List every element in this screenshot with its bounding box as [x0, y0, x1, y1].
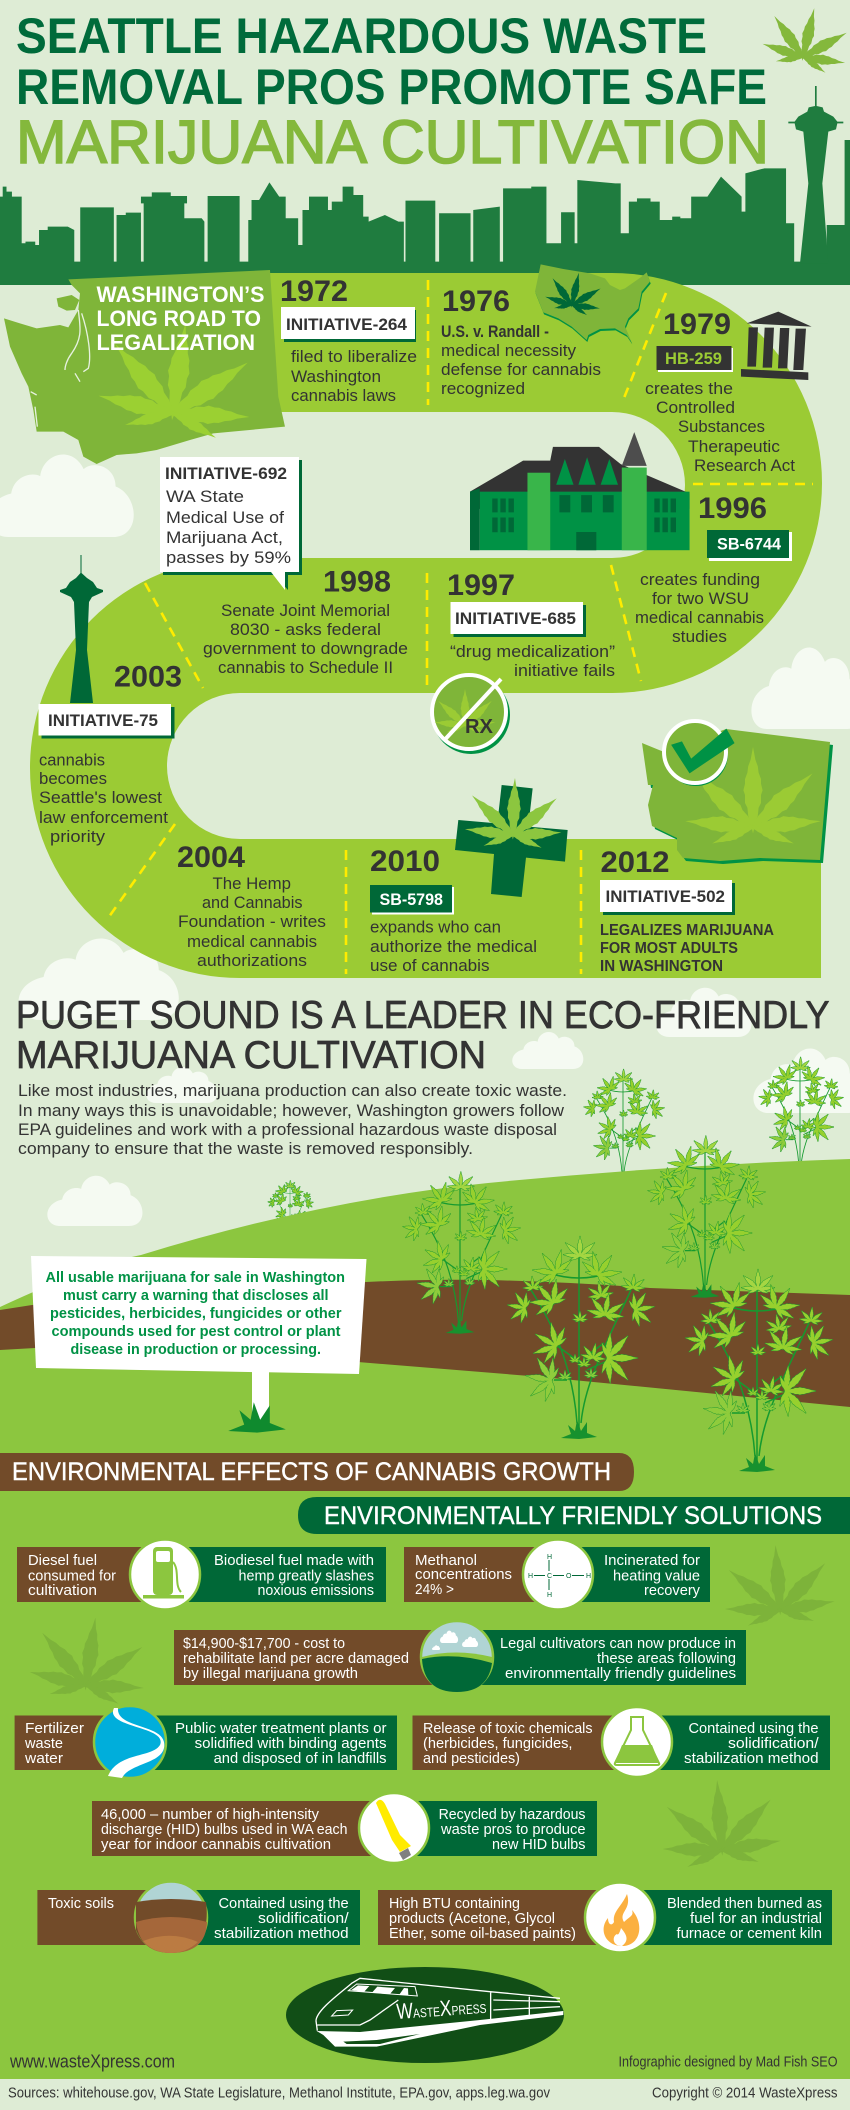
milestone 2004: Foundation - writes	[178, 912, 326, 931]
milestone 2012	[600, 846, 774, 975]
milestone 2010: SB-5798	[380, 891, 443, 909]
item: toxic soils: Toxic soils	[48, 1895, 114, 1912]
item: toxic chemicals: and pesticides)	[423, 1750, 520, 1767]
milestone 2003: becomes	[39, 769, 107, 788]
item: methanol: recovery	[644, 1582, 700, 1599]
milestone 2003: 2003	[114, 660, 182, 694]
milestone 1997: “drug medicalization”	[450, 642, 615, 661]
item: HID bulbs	[92, 1793, 597, 1863]
milestone 2012: LEGALIZES MARIJUANA	[600, 922, 774, 939]
milestone 1976: defense for cannabis	[441, 360, 601, 379]
milestone 1976: U.S. v. Randall -	[441, 322, 549, 341]
icon: methanol molecule: C	[547, 1573, 552, 1580]
item: toxic soils	[37, 1882, 360, 1954]
item: methanol: Incinerated for	[604, 1552, 700, 1569]
title: MARIJUANA CULTIVATION	[16, 108, 769, 176]
hill	[0, 1159, 850, 2079]
icon: RX no-entry	[432, 675, 510, 754]
milestone 1996: creates funding	[640, 570, 760, 589]
item: high BTU products: Blended then burned as	[667, 1895, 822, 1912]
item: fertilizer waste water: water	[24, 1750, 63, 1767]
icon: soil layers	[135, 1882, 207, 1954]
website: www.wasteXpress.com	[9, 2052, 175, 2072]
callout: Initiative-692: Medical Use of	[166, 508, 284, 527]
item: toxic chemicals: solidification/	[728, 1735, 819, 1752]
sign: warning notice: must carry a warning that discloses all	[63, 1287, 328, 1304]
item: toxic chemicals: (herbicides, fungicides,	[423, 1735, 572, 1752]
item: HID bulbs: new HID bulbs	[492, 1836, 586, 1853]
milestone 1979: Controlled	[656, 398, 735, 417]
item: diesel fuel: hemp greatly slashes	[238, 1568, 374, 1584]
item: high BTU products: Ether, some oil-based paints)	[389, 1925, 576, 1942]
item: methanol: concentrations	[415, 1566, 512, 1583]
item: high BTU products: furnace or cement kiln	[676, 1925, 822, 1942]
item: rehabilitation cost: $14,900-$17,700 - cost to	[183, 1635, 345, 1652]
item: diesel fuel: noxious emissions	[258, 1582, 374, 1599]
icon: fuel pump	[143, 1547, 184, 1598]
map: Washington state with heading: LEGALIZATION	[96, 330, 255, 355]
item: toxic chemicals: Release of toxic chemicals	[423, 1720, 592, 1737]
item: diesel fuel: cultivation	[28, 1582, 97, 1599]
item: methanol: 24% >	[415, 1581, 454, 1598]
icon: methanol molecule: O	[566, 1573, 572, 1580]
item: toxic soils: Contained using the	[218, 1895, 349, 1912]
milestone 2003: priority	[50, 827, 106, 846]
icon: HID bulb	[376, 1800, 411, 1860]
milestone 2004: The Hemp	[212, 874, 291, 893]
milestone 1979: Substances	[678, 417, 765, 436]
milestone 1979: Therapeutic	[688, 437, 781, 456]
plants in field	[400, 1135, 836, 1472]
callout: Initiative-692: Marijuana Act,	[166, 528, 283, 547]
sign: warning notice	[31, 1256, 366, 1433]
intro paragraph: EPA guidelines and work with a professional hazardous waste disposal	[18, 1120, 557, 1139]
item: methanol: heating value	[613, 1568, 700, 1584]
icon: space needle	[60, 555, 103, 703]
milestone 1996: 1996	[698, 492, 767, 525]
callout: Initiative-692: passes by 59%	[166, 548, 291, 567]
milestone 1976: 1976	[442, 285, 510, 318]
milestone 1976: medical necessity	[441, 341, 576, 360]
milestone 2004: medical cannabis	[187, 932, 317, 951]
milestone 2003: Seattle's lowest	[39, 788, 162, 807]
milestone 1998: 8030 - asks federal	[230, 620, 381, 639]
milestone 2004	[177, 841, 326, 970]
milestone 1979: Research Act	[694, 456, 795, 475]
title: REMOVAL PROS PROMOTE SAFE	[16, 59, 767, 115]
milestone 2010: expands who can	[370, 918, 501, 936]
icon: RX no-entry: RX	[465, 716, 494, 738]
milestone 1998: cannabis to Schedule II	[218, 658, 393, 677]
far plants	[267, 1057, 845, 1243]
icon: river	[94, 1706, 166, 1778]
milestone 1998: Senate Joint Memorial	[221, 601, 390, 620]
item: toxic chemicals: stabilization method	[684, 1750, 819, 1767]
map: Washington state with check mark	[642, 721, 833, 864]
milestone 1996: for two WSU	[652, 589, 749, 608]
heading: Puget Sound: MARIJUANA CULTIVATION	[16, 1034, 486, 1077]
heading: Puget Sound	[16, 994, 830, 1077]
map: Washington state with heading: LONG ROAD TO	[96, 306, 261, 331]
milestone 1972: Washington	[291, 367, 381, 386]
milestone 1996	[635, 492, 792, 646]
icon: methanol molecule: H	[547, 1592, 552, 1599]
milestone 1998	[203, 566, 408, 677]
milestone 2012: INITIATIVE-502	[606, 888, 725, 906]
milestone 2012: IN WASHINGTON	[600, 958, 723, 975]
item: toxic chemicals	[412, 1707, 830, 1777]
road	[30, 273, 822, 978]
icon: medical cross with leaf	[455, 776, 568, 897]
sign: warning notice: pesticides, herbicides, fungicides or other	[50, 1305, 342, 1322]
item: rehabilitation cost: Legal cultivators can now produce in	[500, 1635, 736, 1652]
milestone 1997: INITIATIVE-685	[455, 610, 576, 628]
icon: flask	[615, 1717, 659, 1765]
icon: methanol molecule: H	[528, 1573, 533, 1580]
milestone 2003: INITIATIVE-75	[48, 712, 158, 730]
milestone 1972	[280, 275, 417, 405]
milestone 1998: government to downgrade	[203, 639, 408, 658]
milestone 1997: initiative fails	[514, 661, 615, 680]
clouds	[0, 455, 850, 1226]
item: fertilizer waste water	[15, 1706, 397, 1778]
title: SEATTLE HAZARDOUS WASTE	[16, 8, 707, 64]
milestone 2010: authorize the medical	[370, 937, 537, 956]
callout: Initiative-692: INITIATIVE-692	[165, 465, 287, 483]
milestone 2004: and Cannabis	[202, 893, 302, 912]
title	[16, 8, 769, 176]
icon: government columns	[741, 312, 812, 380]
item: diesel fuel: consumed for	[28, 1568, 116, 1584]
icon: methanol molecule	[528, 1554, 591, 1599]
milestone 2003	[38, 660, 182, 846]
sign: warning notice: compounds used for pest control or plant	[52, 1323, 340, 1340]
milestone 2012: 2012	[600, 846, 670, 879]
icon: landscape	[421, 1621, 493, 1693]
item: diesel fuel: Biodiesel fuel made with	[214, 1552, 374, 1569]
milestone 1996: studies	[672, 627, 727, 646]
milestone 1997: 1997	[447, 569, 515, 602]
yellow road dashes	[106, 280, 813, 974]
item: methanol	[404, 1540, 710, 1610]
milestone 2012: FOR MOST ADULTS	[600, 940, 738, 957]
milestone 1972: 1972	[280, 275, 348, 308]
icon: university building	[470, 432, 690, 550]
item: methanol: Methanol	[415, 1552, 477, 1569]
milestone 2004: authorizations	[197, 951, 307, 970]
milestone 1972: filed to liberalize	[291, 347, 417, 366]
intro paragraph	[18, 1081, 567, 1158]
icon: methanol molecule: H	[547, 1554, 552, 1561]
milestone 1976	[441, 285, 601, 398]
logo: WasteXpress train: WASTEXPRESS	[396, 1993, 487, 2024]
callout: Initiative-692	[160, 457, 302, 590]
background leaves	[26, 1541, 837, 1873]
header: environmental effects: ENVIRONMENTAL EFFECTS OF CANNABIS GROWTH	[12, 1458, 611, 1486]
icon: leaf top right	[758, 0, 850, 80]
sign: warning notice: disease in production or processing.	[70, 1341, 321, 1358]
milestone 2010	[370, 845, 537, 975]
item: high BTU products: products (Acetone, Glycol	[389, 1910, 555, 1927]
milestone 2003: law enforcement	[39, 808, 168, 827]
intro paragraph: company to ensure that the waste is removed responsibly.	[18, 1139, 473, 1158]
milestone 2003: cannabis	[39, 750, 105, 770]
logo: WasteXpress train	[286, 1967, 564, 2063]
milestone 1976: recognized	[441, 379, 525, 398]
item: high BTU products: High BTU containing	[389, 1895, 520, 1912]
item: toxic soils: solidification/	[258, 1910, 349, 1927]
item: diesel fuel: Diesel fuel	[28, 1552, 97, 1569]
item: high BTU products: fuel for an industrial	[690, 1910, 822, 1927]
item: high BTU products	[378, 1882, 832, 1952]
milestone 2004: 2004	[177, 841, 245, 874]
skyline	[0, 86, 850, 285]
item: fertilizer waste water: solidified with binding agents	[195, 1735, 386, 1752]
header: friendly solutions: ENVIRONMENTALLY FRIENDLY SOLUTIONS	[324, 1502, 822, 1530]
icon: methanol molecule: H	[586, 1573, 591, 1580]
milestone 1997	[447, 569, 615, 680]
sign: warning notice: All usable marijuana for sale in Washington	[46, 1269, 345, 1286]
item: rehabilitation cost: by illegal marijuana growth	[183, 1665, 358, 1682]
map: Washington state with heading: WASHINGTON’S	[96, 282, 264, 307]
milestone 1996: SB-6744	[717, 536, 782, 554]
item: toxic chemicals: Contained using the	[688, 1720, 818, 1737]
milestone 1972: INITIATIVE-264	[286, 316, 408, 334]
item: HID bulbs: waste pros to produce	[440, 1821, 586, 1838]
milestone 1979: 1979	[663, 308, 731, 341]
item: fertilizer waste water: Public water treatment plants or	[175, 1720, 386, 1737]
milestone 1998: 1998	[323, 566, 391, 598]
icon: US map	[535, 264, 651, 344]
item: rehabilitation cost: environmentally friendly guidelines	[505, 1665, 736, 1682]
milestone 2010: 2010	[370, 845, 440, 878]
soil band	[0, 1280, 850, 1407]
intro paragraph: In many ways this is unavoidable; however, Washington growers follow	[18, 1101, 565, 1120]
item: rehabilitation cost: rehabilitate land per acre damaged	[183, 1650, 409, 1667]
milestone 1979: HB-259	[665, 350, 722, 368]
callout: Initiative-692: WA State	[166, 487, 244, 506]
milestone 2010: use of cannabis	[370, 956, 490, 975]
footer	[0, 2079, 850, 2110]
item: HID bulbs: year for indoor cannabis cultivation	[101, 1836, 331, 1853]
item: HID bulbs: 46,000 – number of high-intensity	[101, 1806, 319, 1823]
footer: Sources: whitehouse.gov, WA State Legislature, Methanol Institute, EPA.gov, apps.leg.wa.gov	[8, 2084, 550, 2102]
intro paragraph: Like most industries, marijuana production can also create toxic waste.	[18, 1081, 567, 1100]
item: fertilizer waste water: Fertilizer	[25, 1720, 84, 1737]
icon: flame	[604, 1894, 639, 1946]
milestone 1996: medical cannabis	[635, 608, 764, 627]
item: toxic soils: stabilization method	[214, 1925, 349, 1942]
item: HID bulbs: Recycled by hazardous	[439, 1806, 586, 1823]
item: rehabilitation cost	[174, 1621, 746, 1693]
item: fertilizer waste water: waste	[24, 1735, 63, 1752]
map: Washington state with heading	[4, 270, 285, 464]
milestone 1979	[645, 308, 795, 475]
item: rehabilitation cost: these areas following	[597, 1650, 736, 1667]
milestone 1972: cannabis laws	[291, 386, 396, 405]
item: diesel fuel	[17, 1540, 386, 1610]
item: HID bulbs: discharge (HID) bulbs used in WA each	[101, 1821, 348, 1838]
milestone 1979: creates the	[645, 379, 733, 398]
item: fertilizer waste water: and disposed of in landfills	[214, 1750, 386, 1767]
